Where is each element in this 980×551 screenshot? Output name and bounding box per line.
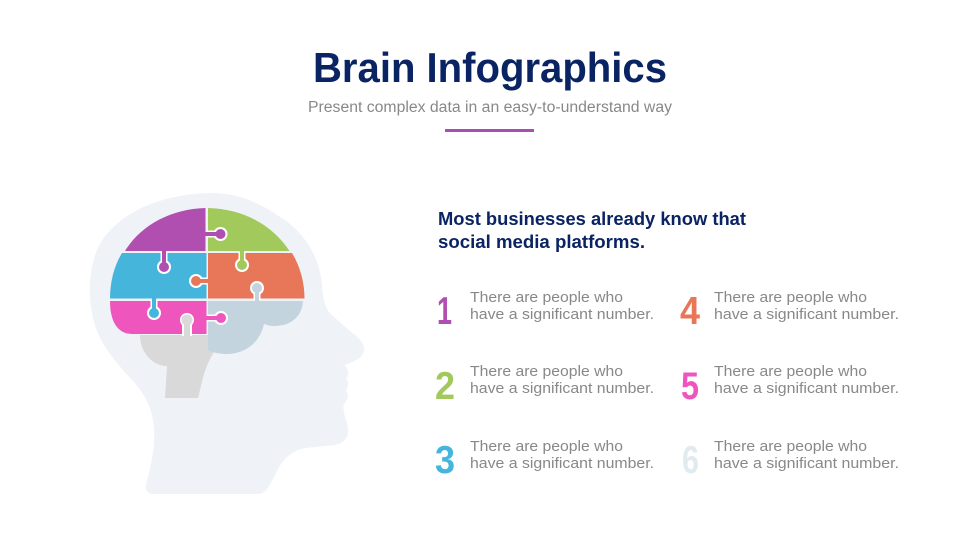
heading: social media platforms. bbox=[438, 232, 645, 252]
subtitle: Present complex data in an easy-to-understand way bbox=[308, 99, 672, 116]
item 2: have a significant number. bbox=[470, 380, 654, 397]
item 1 bbox=[437, 289, 654, 333]
item 4: There are people who bbox=[714, 289, 867, 306]
item 4 bbox=[680, 289, 899, 333]
puzzle tab: purple into green bbox=[204, 227, 228, 241]
item 3: There are people who bbox=[470, 438, 623, 455]
brain stem bbox=[140, 335, 214, 398]
item 1: have a significant number. bbox=[470, 306, 654, 323]
item 6: have a significant number. bbox=[714, 455, 899, 472]
item 3 bbox=[435, 438, 654, 482]
icon: head with puzzle brain bbox=[90, 193, 364, 494]
puzzle tab: green into orange bbox=[235, 249, 249, 272]
item 1: There are people who bbox=[470, 289, 623, 306]
item 4: have a significant number. bbox=[714, 306, 899, 323]
item 1: 1 bbox=[437, 290, 452, 333]
item 6: There are people who bbox=[714, 438, 867, 455]
puzzle piece: orange bbox=[208, 253, 304, 298]
puzzle tab: purple into blue bbox=[157, 249, 171, 274]
item 2: There are people who bbox=[470, 363, 623, 380]
puzzle tab: orange into blue bbox=[189, 274, 209, 288]
puzzle piece: light blue bbox=[208, 301, 303, 354]
item 3: have a significant number. bbox=[470, 455, 654, 472]
puzzle piece: blue bbox=[110, 253, 206, 298]
title underline bbox=[445, 129, 534, 132]
title: Brain Infographics bbox=[313, 44, 667, 91]
item 5 bbox=[681, 363, 899, 408]
head silhouette bbox=[90, 193, 364, 494]
item 2 bbox=[435, 363, 654, 408]
item 5: have a significant number. bbox=[714, 380, 899, 397]
item 5: 5 bbox=[681, 365, 699, 408]
heading bbox=[438, 209, 746, 252]
heading: Most businesses already know that bbox=[438, 209, 746, 229]
puzzle piece: pink bbox=[110, 301, 206, 334]
item 6 bbox=[682, 438, 899, 482]
puzzle tab: light blue into orange bbox=[250, 281, 264, 303]
item 3: 3 bbox=[435, 439, 455, 482]
puzzle tab: pink into light blue bbox=[205, 311, 228, 325]
item 6: 6 bbox=[682, 439, 699, 482]
puzzle tab: blue into pink bbox=[147, 297, 161, 320]
puzzle piece: purple bbox=[125, 208, 206, 251]
puzzle piece: green bbox=[208, 208, 290, 251]
puzzle tab: stem into pink bbox=[180, 313, 194, 337]
item 2: 2 bbox=[435, 365, 455, 408]
item 4: 4 bbox=[680, 290, 700, 333]
item 5: There are people who bbox=[714, 363, 867, 380]
